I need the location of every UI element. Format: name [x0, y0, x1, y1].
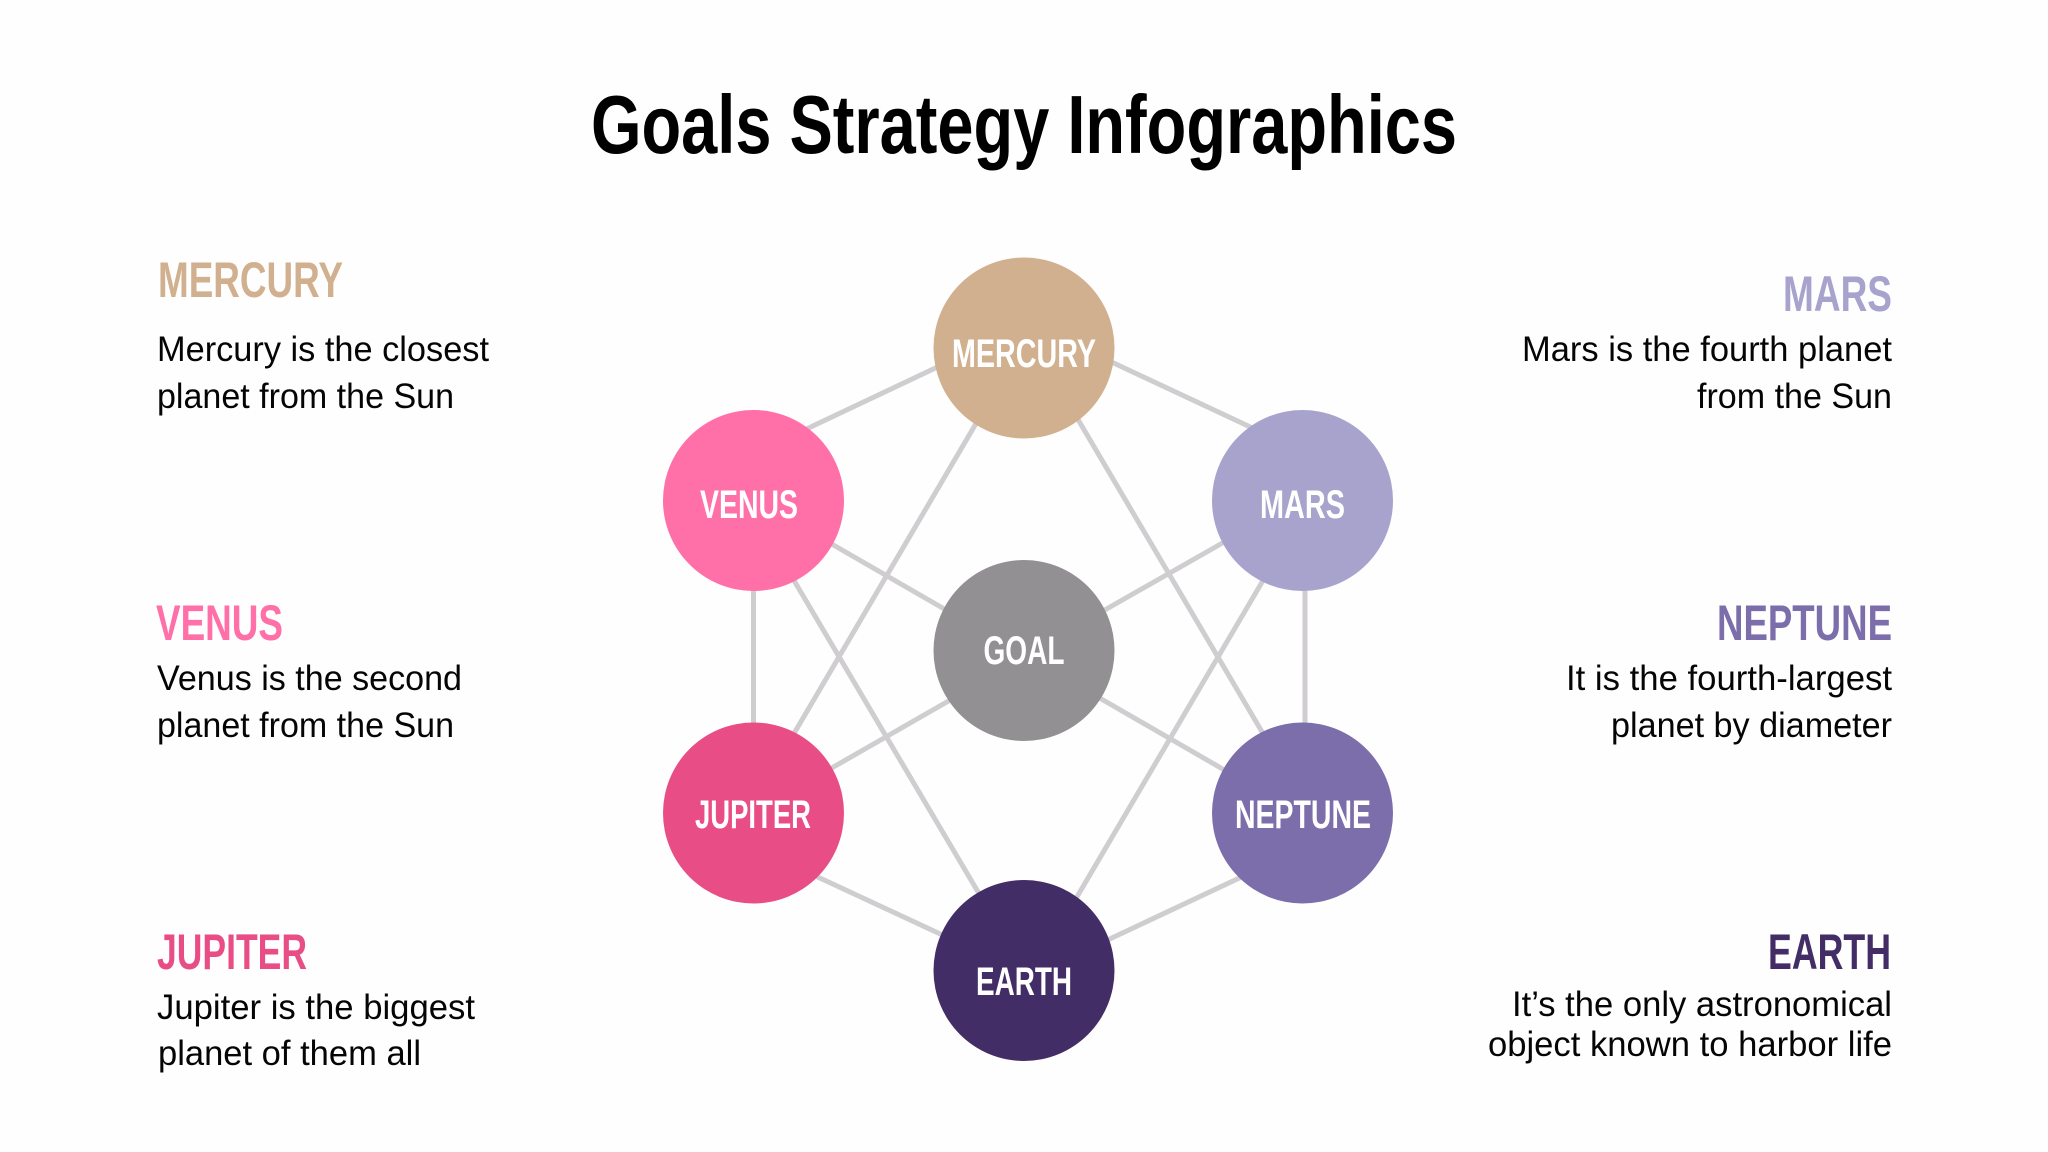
text block: Mercury: planet from the Sun	[157, 377, 454, 416]
text block: Earth	[1488, 924, 1892, 1064]
text block: Mars	[1522, 266, 1892, 416]
text block: Venus: planet from the Sun	[157, 706, 454, 745]
text block: Venus: Venus is the second	[157, 659, 462, 698]
node: Neptune: NEPTUNE	[1235, 793, 1371, 837]
text block: Venus: VENUS	[156, 595, 283, 651]
node: Goal: GOAL	[984, 629, 1064, 673]
text block: Neptune: planet by diameter	[1611, 706, 1892, 745]
node: Mars: MARS	[1260, 483, 1345, 527]
text block: Mars: Mars is the fourth planet	[1522, 330, 1892, 369]
node: Mercury: MERCURY	[952, 332, 1096, 376]
text block: Mars: MARS	[1783, 266, 1892, 322]
node: Mercury	[934, 258, 1114, 438]
text block: Earth: It’s the only astronomical	[1512, 985, 1892, 1024]
node: Venus	[663, 410, 844, 591]
text block: Mars: from the Sun	[1697, 377, 1892, 416]
node: Earth	[934, 880, 1114, 1061]
network connector lines	[754, 358, 1305, 944]
node: Goal	[934, 560, 1114, 741]
text block: Jupiter: planet of them all	[158, 1034, 421, 1073]
text block: Neptune	[1566, 595, 1892, 745]
text block: Earth: EARTH	[1768, 924, 1891, 980]
text block: Mercury	[157, 252, 489, 416]
node: Earth: EARTH	[976, 960, 1072, 1004]
node: Mars	[1212, 410, 1393, 591]
text block: Mercury: Mercury is the closest	[157, 330, 489, 369]
node: Jupiter	[663, 722, 844, 904]
text block: Neptune: It is the fourth-largest	[1566, 659, 1892, 698]
node: Jupiter: JUPITER	[695, 793, 811, 837]
text block: Neptune: NEPTUNE	[1717, 595, 1892, 651]
title: Goals Strategy Infographics	[591, 78, 1457, 171]
node: Venus: VENUS	[700, 483, 798, 527]
text block: Earth: object known to harbor life	[1488, 1025, 1892, 1064]
node: Neptune	[1212, 722, 1393, 904]
text block: Jupiter: JUPITER	[157, 924, 307, 980]
text block: Venus	[156, 595, 462, 745]
text block: Jupiter: Jupiter is the biggest	[157, 988, 475, 1027]
text block: Jupiter	[157, 924, 475, 1073]
text block: Mercury: MERCURY	[158, 252, 343, 308]
